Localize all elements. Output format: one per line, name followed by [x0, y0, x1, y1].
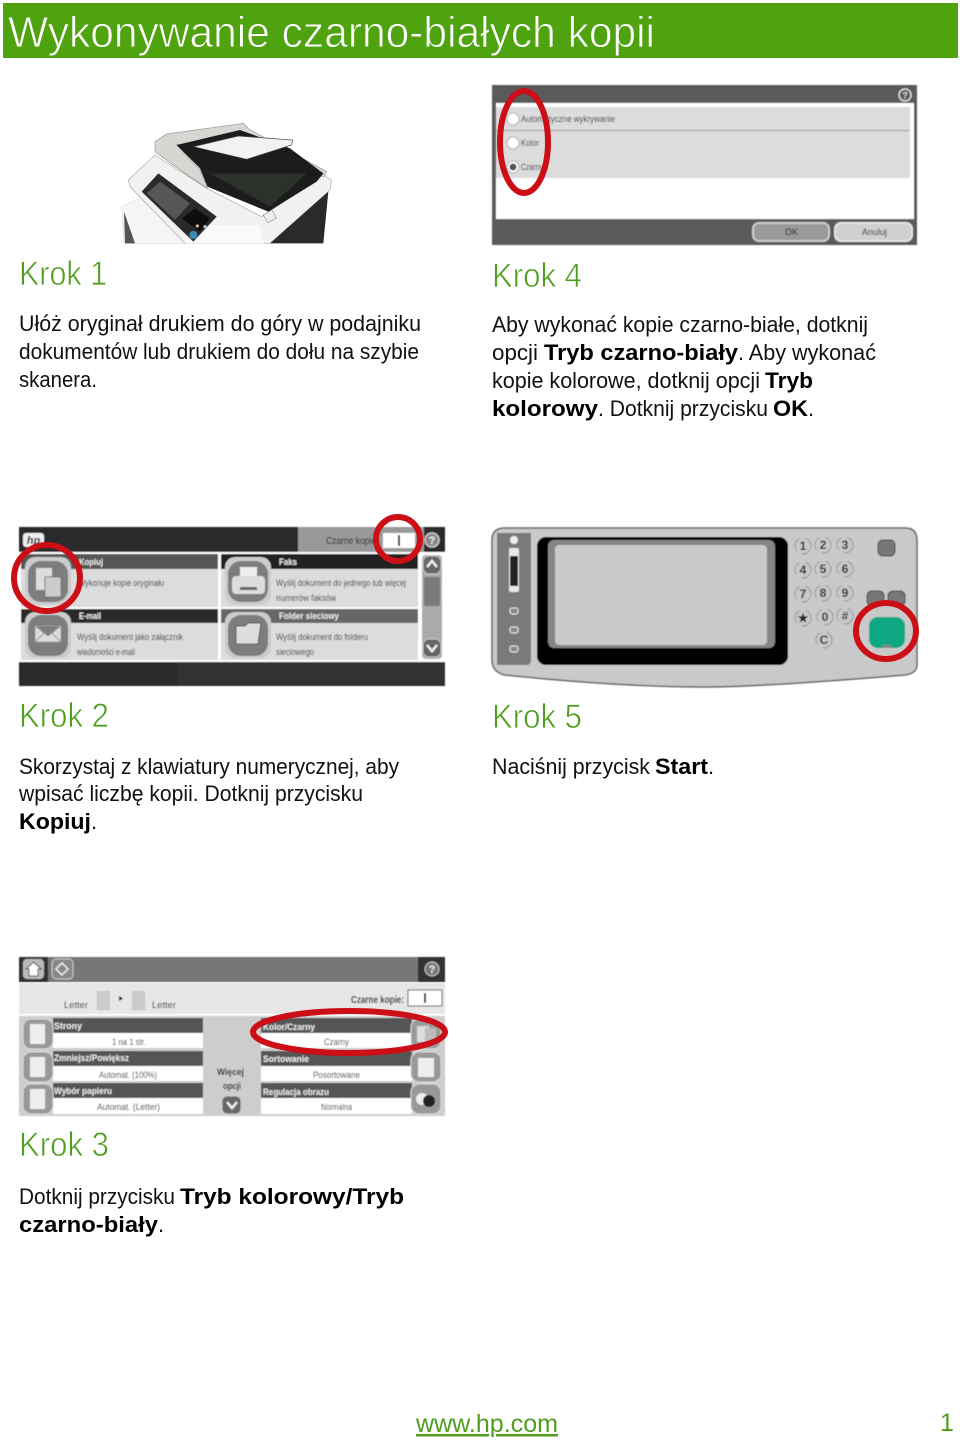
step 2 text: . — [91, 809, 97, 834]
screen: home menu: Folder sieciowy — [279, 611, 339, 621]
step 2 text: Skorzystaj z klawiatury numerycznej, aby — [19, 754, 399, 779]
screen: home menu: Wykonuje kopie oryginału — [78, 578, 164, 588]
left strip with slider — [497, 533, 531, 665]
step 4 text — [492, 312, 876, 421]
screen: copy settings: Letter — [152, 1000, 176, 1010]
screen: copy settings: Czarne kopie: — [351, 995, 404, 1006]
keypad: 1 — [800, 539, 807, 553]
keypad: 9 — [842, 586, 849, 600]
screen: home menu: sieciowego — [276, 647, 314, 657]
scrollbar — [422, 555, 442, 659]
screen: colour mode dialog: ? — [902, 90, 908, 100]
step 2 text — [18, 754, 399, 834]
highlight: colour/black option — [253, 1011, 445, 1053]
screen: colour mode dialog: Czarny — [521, 162, 543, 172]
screen: copy settings: Kolor/Czarny — [263, 1022, 315, 1032]
screen: copy settings — [19, 957, 445, 1116]
step 1 text: dokumentów lub drukiem do dołu na szybie — [19, 339, 419, 364]
step 3 text — [19, 1184, 404, 1237]
screen: copy settings: Wybór papieru — [54, 1086, 112, 1096]
screen: copy settings: opcji — [223, 1081, 241, 1091]
step 3 text: czarno-biały — [19, 1212, 159, 1237]
screen: home menu: Faks — [279, 557, 297, 567]
step 4 heading: Krok 4 — [492, 257, 582, 295]
screen: colour mode dialog — [492, 85, 917, 245]
keypad: 0 — [822, 610, 829, 624]
step 4 text: Aby wykonać kopie czarno-białe, dotknij — [492, 312, 868, 337]
screen: copy settings: Więcej — [217, 1067, 244, 1077]
screen: home menu: numerów faksów — [276, 593, 336, 603]
step 4 text: . — [808, 396, 814, 421]
display — [537, 537, 788, 665]
keypad: 5 — [820, 562, 827, 576]
screen: home menu — [14, 517, 445, 686]
highlight: start button — [856, 603, 916, 659]
keypad: C — [820, 633, 829, 647]
step 4 text: kolorowy — [492, 396, 599, 421]
screen: copy settings: Czarny — [324, 1037, 349, 1047]
screen: colour mode dialog: Kolor — [521, 138, 539, 148]
step 3 text: Dotknij przycisku — [19, 1184, 175, 1209]
step 5 text: . — [708, 754, 714, 779]
screen: home menu: wiadomości e-mail — [76, 647, 135, 657]
step 2 heading: Krok 2 — [19, 697, 109, 735]
screen: copy settings: Automat. (Letter) — [97, 1102, 160, 1112]
footer link: www.hp.com — [415, 1410, 558, 1438]
screen: colour mode dialog: Anuluj — [862, 227, 887, 237]
keypad: # — [842, 609, 849, 623]
highlight: number of copies — [376, 517, 420, 561]
icon: network folder — [225, 612, 271, 658]
screen: copy settings: 1 na 1 str. — [112, 1037, 146, 1047]
screen: colour mode dialog: OK — [785, 227, 798, 237]
screen: copy settings: ? — [429, 964, 436, 976]
screen: home menu: Czarne kopie — [326, 536, 376, 547]
screen: colour mode dialog: Automatyczne wykrywanie — [521, 114, 615, 124]
keypad: 6 — [842, 562, 849, 576]
screen: copy settings: Sortowanie — [263, 1054, 309, 1064]
screen: home menu: Wyślij dokument do jednego lub więcej — [276, 578, 406, 588]
step 5 text: Start — [655, 754, 709, 779]
step 4 text: OK — [773, 396, 808, 421]
screen: copy settings: Strony — [54, 1021, 82, 1031]
screen: home menu: hp — [27, 535, 40, 547]
step 4 text: opcji — [492, 340, 538, 365]
step 4 text: Tryb czarno-biały — [544, 340, 739, 365]
step 3 text: Tryb kolorowy/Tryb — [180, 1184, 404, 1209]
screen: home menu: ? — [429, 535, 436, 547]
icon: fax — [225, 557, 271, 605]
keypad: 2 — [820, 538, 827, 552]
step 5 text: Naciśnij przycisk — [492, 754, 651, 779]
step 4 text: . Aby wykonać — [738, 340, 876, 365]
screen: copy settings: Posortowane — [313, 1070, 360, 1080]
step 4 text: . Dotknij przycisku — [598, 396, 768, 421]
title banner — [3, 3, 958, 58]
step 5 heading: Krok 5 — [492, 698, 582, 736]
step 4 text: kopie kolorowe, dotknij opcji — [492, 368, 760, 393]
keypad: 8 — [820, 586, 827, 600]
step 4 text: Tryb — [765, 368, 813, 393]
keypad: 7 — [800, 587, 807, 601]
illustration: printer with document feeder — [122, 123, 332, 243]
screen: home menu: E-mail — [79, 611, 101, 621]
icons: option tiles, left column — [23, 1019, 53, 1114]
control panel illustration — [492, 528, 917, 687]
keypad — [795, 537, 853, 648]
keypad: ★ — [798, 611, 809, 625]
step 1 heading: Krok 1 — [19, 255, 107, 293]
screen: home menu: Kopiuj — [79, 557, 103, 567]
step 3 text: . — [158, 1212, 164, 1237]
page number: 1 — [940, 1409, 954, 1437]
title banner: Wykonywanie czarno-białych kopii — [8, 8, 655, 57]
screen: copy settings: Zmniejsz/Powiększ — [54, 1053, 129, 1063]
screen: copy settings: Letter — [64, 1000, 88, 1010]
highlight: copy icon — [14, 545, 80, 611]
step 1 text: Ułóż oryginał drukiem do góry w podajniku — [19, 311, 421, 336]
screen: copy settings: Normalna — [321, 1102, 352, 1112]
step 2 text: Kopiuj — [19, 809, 91, 834]
step 1 text: skanera. — [19, 367, 97, 392]
screen: copy settings: Automat. (100%) — [99, 1070, 157, 1080]
keypad: 3 — [842, 538, 849, 552]
icon: copy — [25, 557, 71, 605]
step 2 text: wpisać liczbę kopii. Dotknij przycisku — [18, 781, 363, 806]
icon: e-mail — [25, 612, 71, 658]
keypad: 4 — [800, 563, 807, 577]
step 3 heading: Krok 3 — [19, 1126, 109, 1164]
screen: copy settings: Regulacja obrazu — [263, 1087, 329, 1097]
screen: home menu: Wyślij dokument jako załącznik — [77, 632, 183, 642]
screen: home menu: Wyślij dokument do folderu — [276, 632, 368, 642]
highlight: radio buttons — [500, 91, 548, 193]
step 1 text — [19, 311, 421, 392]
icons: option tiles, right column — [411, 1019, 441, 1114]
